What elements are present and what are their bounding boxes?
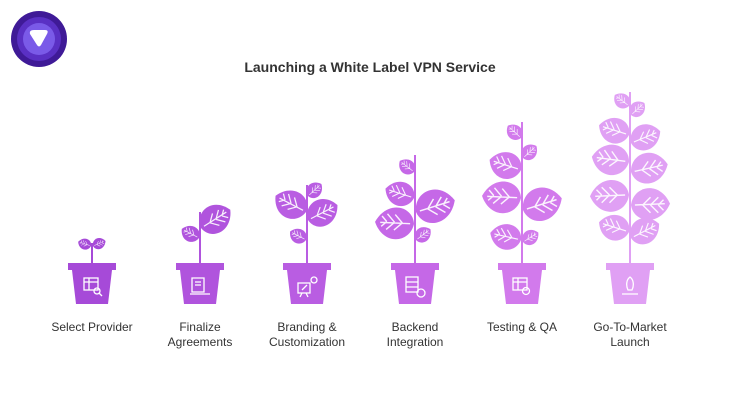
label 4 [387,320,443,349]
plant 2 [176,198,237,304]
icon: testing [513,278,530,294]
label 2: Agreements [168,335,232,349]
label 3: Branding & [277,320,337,334]
label 3 [269,320,345,349]
icon: rocket [622,277,638,294]
icon: provider [84,278,102,296]
label 6: Launch [610,335,650,349]
label 1: Select Provider [51,320,133,334]
label 4: Backend [392,320,438,334]
label 5: Testing & QA [487,320,557,334]
title: Launching a White Label VPN Service [244,59,496,75]
label 6 [593,320,667,349]
label 2 [168,320,232,349]
icon: backend [406,277,425,297]
label 3: Customization [269,335,345,349]
label 4: Integration [387,335,443,349]
icon: agreement [190,278,210,294]
plant 3 [269,178,343,304]
plant 5 [481,120,566,304]
icon: branding [298,277,317,297]
plant 4 [374,155,459,304]
plant 6 [589,89,670,304]
plant 1 [68,236,116,304]
label 2: Finalize [179,320,221,334]
label 6: Go-To-Market [593,320,667,334]
logo [11,11,67,67]
